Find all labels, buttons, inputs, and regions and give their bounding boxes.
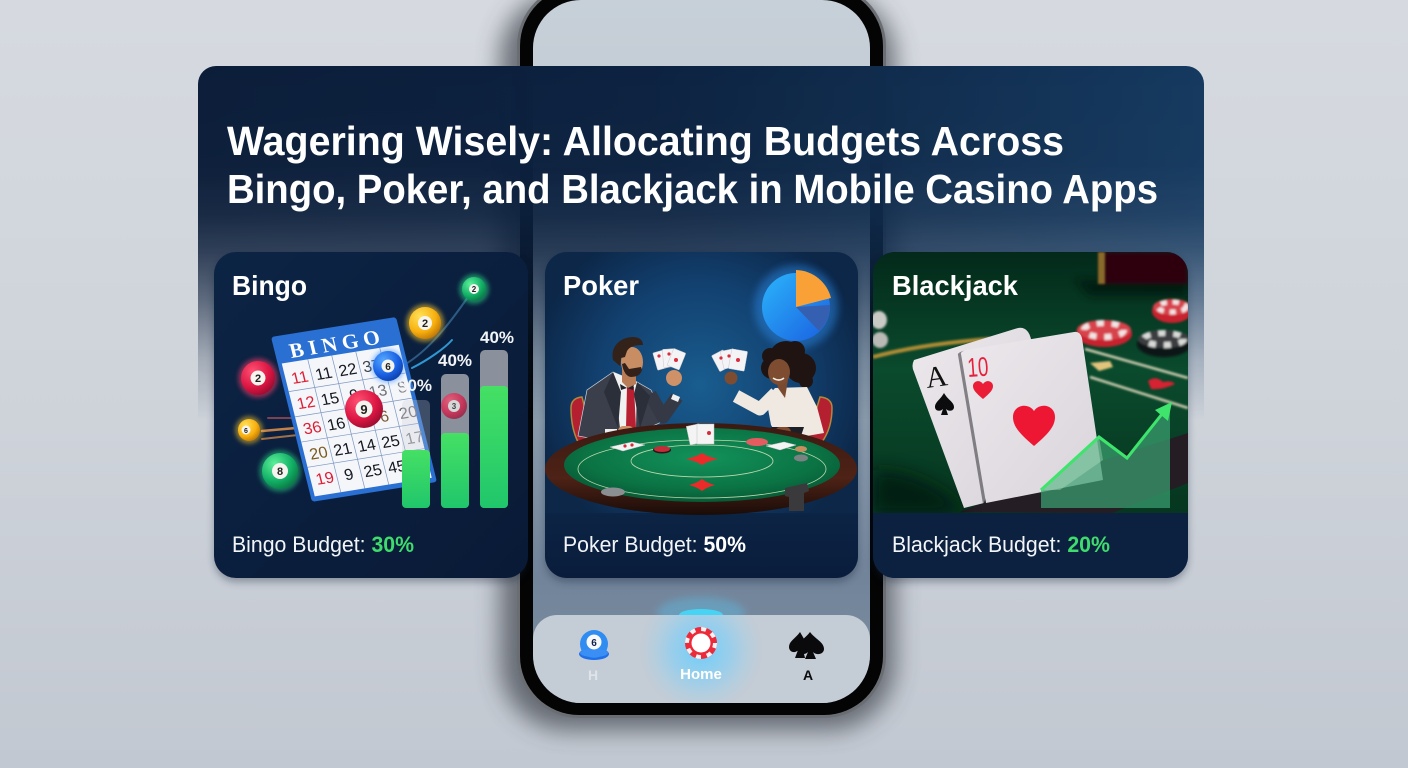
nav icon: bingo ball: 6 bbox=[591, 638, 597, 649]
table cards and chips bbox=[601, 424, 809, 511]
bingo card: 9 bbox=[348, 386, 361, 405]
ten card: 10 bbox=[966, 352, 989, 383]
nav icon: bingo ball bbox=[579, 630, 609, 660]
table photo bbox=[871, 252, 1192, 514]
bingo balls: 2 bbox=[472, 285, 477, 294]
heading: blackjack: Blackjack bbox=[892, 270, 1018, 301]
woman player bbox=[711, 341, 824, 437]
bingo card: 13 bbox=[367, 381, 389, 402]
bingo card bbox=[271, 317, 437, 502]
bingo card: 22 bbox=[337, 360, 359, 380]
panel: blackjack bbox=[871, 252, 1192, 578]
bingo balls: 9 bbox=[360, 402, 368, 417]
bingo card: 12 bbox=[295, 393, 317, 413]
bar chart: 40% bbox=[480, 328, 514, 347]
title: Bingo, Poker, and Blackjack in Mobile Casino Apps bbox=[227, 166, 1158, 212]
bingo card: 19 bbox=[314, 469, 336, 489]
bingo card: 11 bbox=[313, 364, 334, 384]
bingo card: 6 bbox=[378, 407, 391, 426]
phone mockup bbox=[500, 0, 895, 730]
bingo balls: 3 bbox=[452, 402, 457, 411]
nav icon: spades bbox=[789, 632, 824, 659]
poker table bbox=[545, 423, 857, 515]
bingo card: 20 bbox=[308, 443, 330, 464]
bingo card: 17 bbox=[404, 428, 426, 448]
bingo card: 14 bbox=[356, 436, 378, 456]
budget label: blackjack: Blackjack Budget: 20% bbox=[892, 532, 1110, 557]
panel: poker bbox=[545, 252, 858, 578]
bingo card: 37 bbox=[361, 356, 383, 376]
spade glyph bbox=[935, 393, 954, 415]
title: Wagering Wisely: Allocating Budgets Across bbox=[227, 118, 1064, 164]
bingo balls bbox=[235, 274, 489, 492]
bingo balls: 6 bbox=[385, 362, 391, 373]
nav icon: poker chip bbox=[685, 627, 717, 659]
bingo card: 25 bbox=[380, 432, 402, 452]
chairs bbox=[571, 397, 832, 442]
bingo card: 45 bbox=[386, 457, 408, 477]
nav label: spades: A bbox=[803, 667, 813, 683]
phone screen bbox=[533, 0, 870, 703]
bingo card: 8 bbox=[396, 378, 409, 397]
nav label: home: Home bbox=[680, 666, 722, 683]
bar chart: 30% bbox=[398, 376, 432, 395]
bar chart: 40% bbox=[438, 351, 472, 370]
budget label: bingo: Bingo Budget: 30% bbox=[232, 532, 414, 557]
bingo card: 9 bbox=[342, 465, 356, 484]
bingo card: BINGO bbox=[287, 324, 387, 363]
bingo card: 16 bbox=[325, 414, 347, 434]
bingo card: 21 bbox=[332, 440, 354, 460]
ball trails bbox=[262, 297, 468, 439]
trend chart bbox=[1041, 402, 1172, 508]
card shadows bbox=[214, 256, 1188, 582]
table diamonds bbox=[686, 453, 718, 491]
heading: poker: Poker bbox=[563, 270, 639, 301]
bingo balls: 8 bbox=[277, 466, 283, 478]
title bbox=[227, 118, 1158, 212]
bar chart bbox=[398, 328, 514, 508]
header panel bbox=[198, 66, 1204, 410]
bottom navigation bbox=[533, 594, 870, 703]
ace card: A bbox=[923, 359, 950, 395]
bingo balls: 2 bbox=[422, 318, 428, 330]
bingo card: 20 bbox=[397, 403, 419, 423]
heading: bingo: Bingo bbox=[232, 270, 307, 301]
ace card bbox=[912, 328, 1032, 508]
panel: bingo bbox=[214, 252, 528, 578]
ten card bbox=[958, 332, 1103, 504]
bottom strip bbox=[873, 513, 1188, 578]
big heart bbox=[1013, 406, 1055, 446]
bingo balls: 2 bbox=[255, 373, 261, 385]
bingo card: 11 bbox=[289, 368, 310, 388]
pie chart bbox=[754, 265, 838, 349]
man player bbox=[578, 337, 686, 442]
bingo card: 25 bbox=[362, 461, 384, 481]
nav label: bingo: H bbox=[588, 667, 598, 683]
bingo card: 36 bbox=[301, 418, 323, 438]
budget label: poker: Poker Budget: 50% bbox=[563, 532, 746, 557]
bingo card: 15 bbox=[319, 389, 341, 409]
small heart bbox=[973, 381, 993, 399]
bingo balls: 6 bbox=[244, 428, 248, 435]
